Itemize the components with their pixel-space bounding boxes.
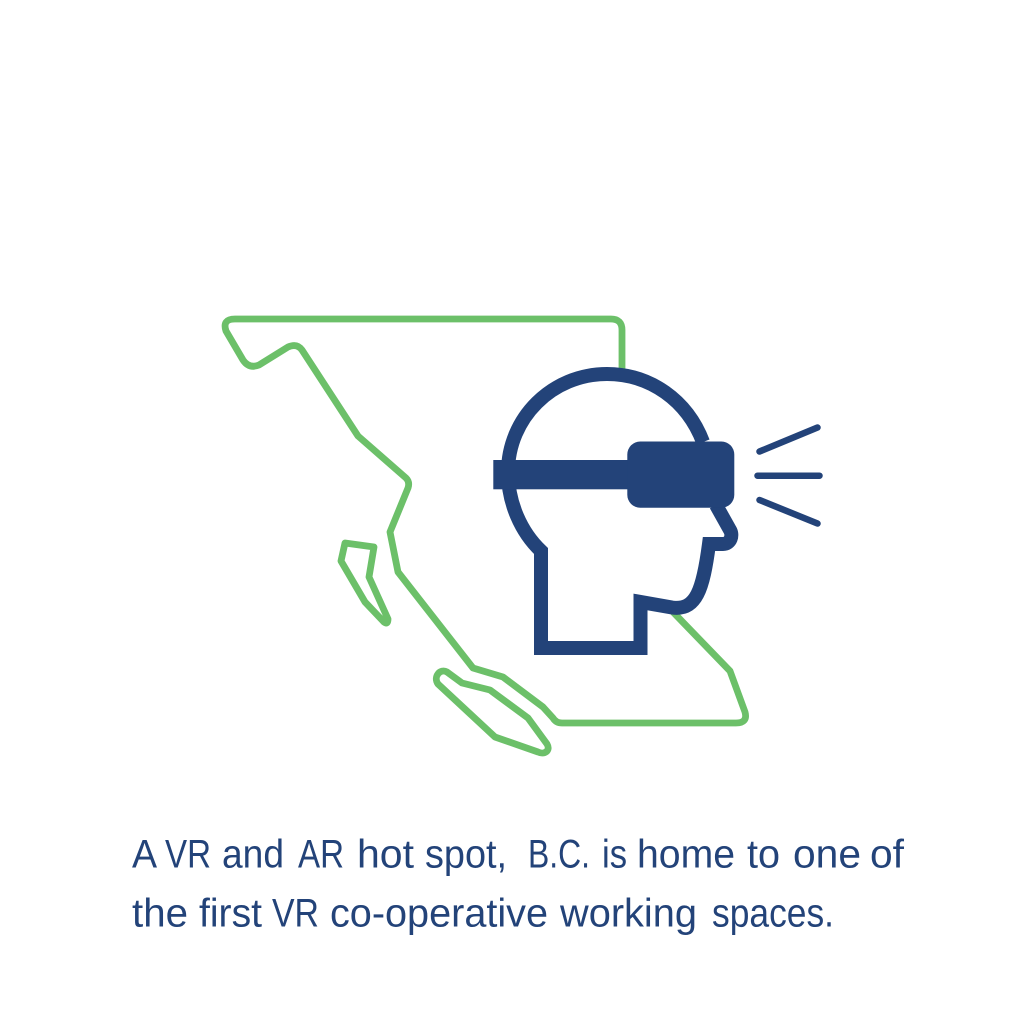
caption text: one — [793, 832, 861, 876]
caption text: B.C. — [528, 832, 590, 876]
caption text: and — [222, 832, 284, 876]
map: British Columbia outline with islands — [225, 319, 746, 753]
map: Vancouver Island — [436, 671, 548, 753]
caption text: the — [132, 892, 188, 936]
caption text: A — [132, 832, 157, 876]
caption text: home — [637, 832, 735, 876]
head outline — [508, 374, 731, 648]
caption text: to — [747, 832, 780, 876]
headset visor — [627, 442, 734, 508]
caption text: spaces. — [712, 892, 834, 936]
caption text: is — [602, 832, 627, 876]
caption text: spot, — [425, 832, 507, 876]
caption text: hot — [357, 832, 414, 876]
caption text: working — [559, 892, 697, 936]
headset strap — [493, 460, 633, 489]
caption text: AR — [298, 832, 344, 876]
caption text: of — [870, 832, 905, 876]
caption text: co-operative — [330, 892, 548, 936]
signal lines — [758, 428, 820, 524]
caption text — [132, 832, 905, 936]
caption text: VR — [165, 832, 211, 876]
caption text: first — [199, 892, 262, 936]
caption text: VR — [272, 892, 319, 936]
icon: head wearing VR headset — [493, 374, 820, 648]
map: mainland — [225, 319, 746, 723]
map: Haida Gwaii — [341, 543, 388, 623]
